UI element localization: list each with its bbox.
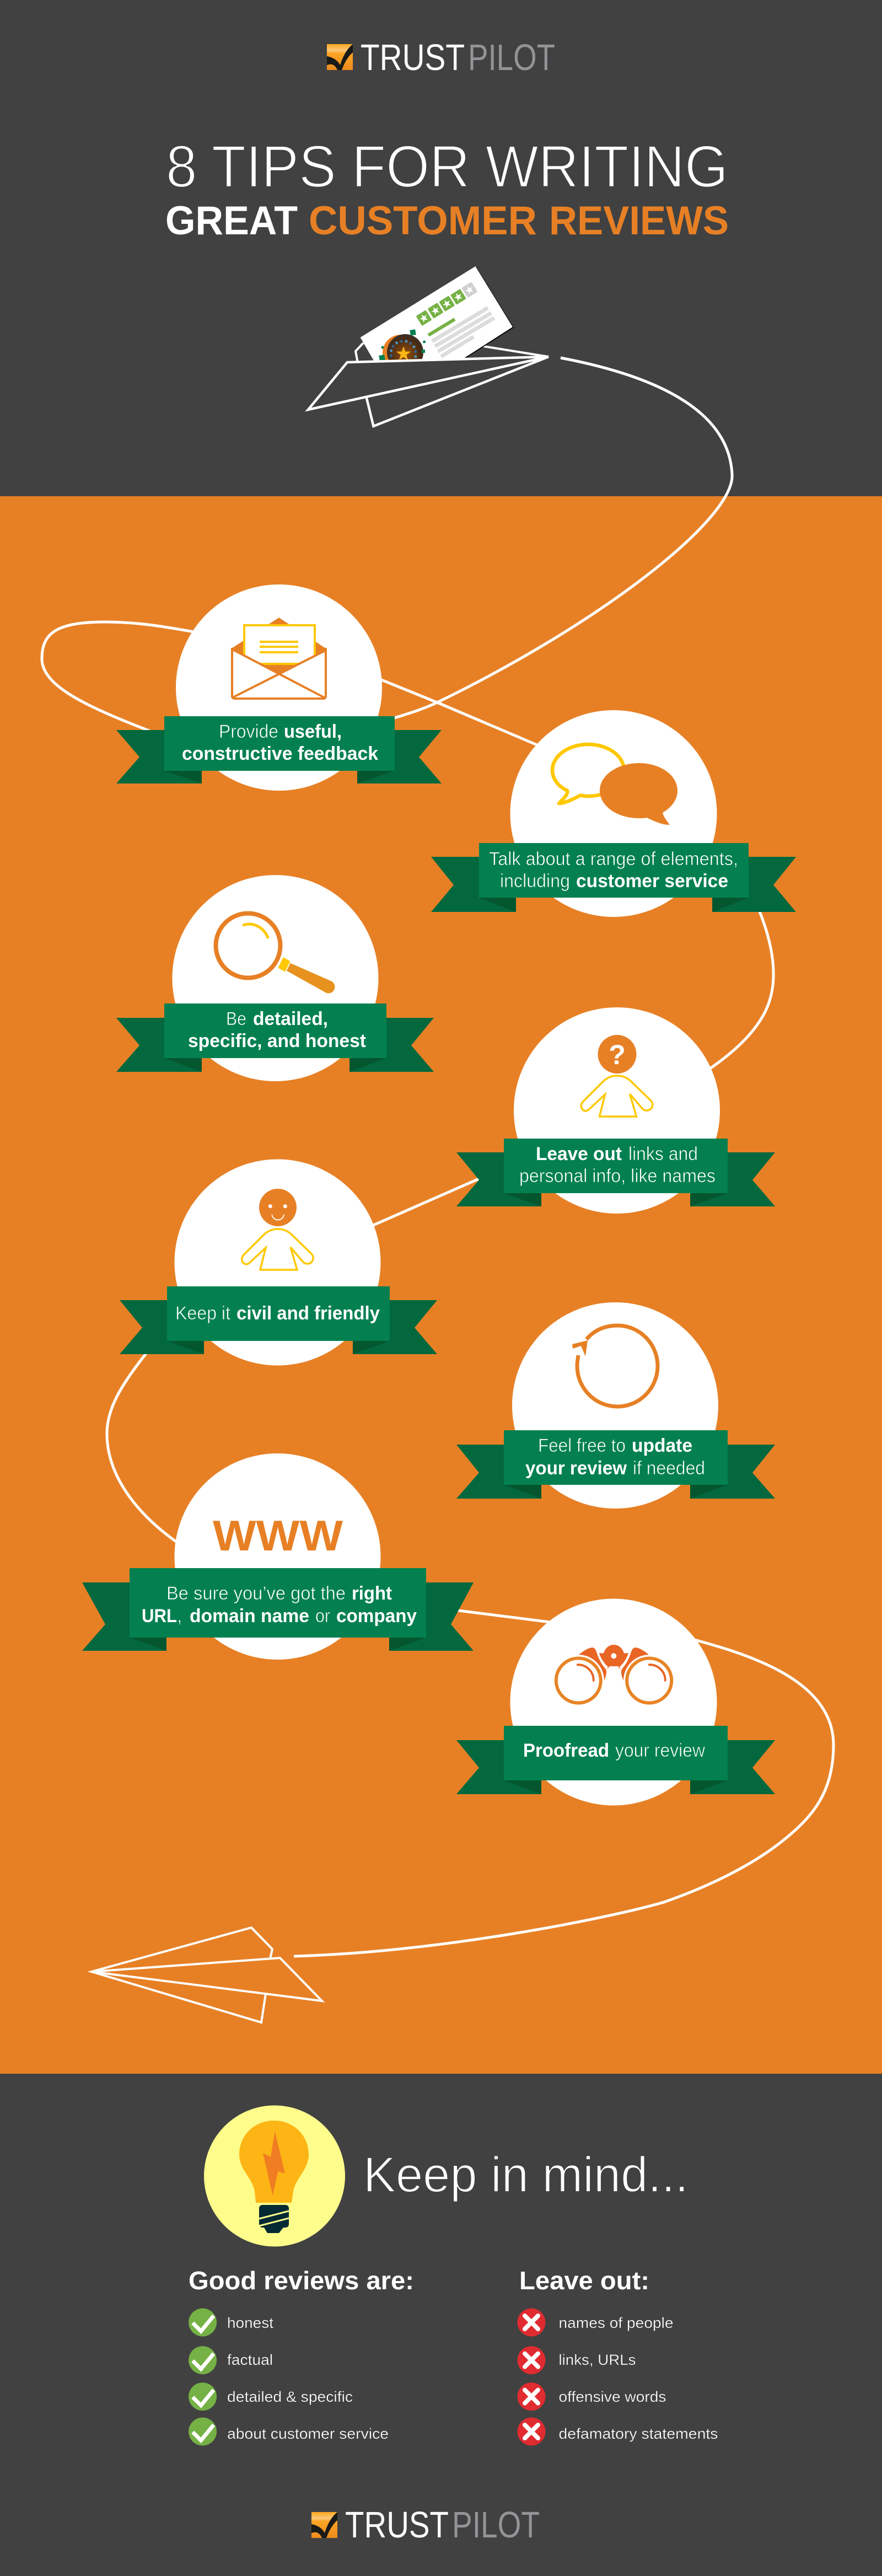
icon: circular arrow — [572, 1325, 658, 1407]
cross: names of people: names of people — [559, 2315, 674, 2331]
ribbon: right URL — [82, 1568, 474, 1651]
ribbon: useful feedback: Provide — [219, 721, 278, 742]
ribbon: right URL: right — [352, 1583, 392, 1604]
ribbon: update your review: update — [632, 1435, 692, 1456]
checklist: about customer service — [189, 2417, 389, 2446]
icon: landing paper plane — [92, 1928, 322, 2022]
icon: open envelope — [232, 618, 326, 699]
title — [165, 133, 729, 243]
review card — [361, 266, 514, 371]
cross: defamatory statements: defamatory statements — [559, 2425, 718, 2442]
tip 6: update your review — [456, 1302, 775, 1509]
ribbon: range of elements: Talk about a range of elements, — [489, 849, 738, 870]
icon: www: WWW — [213, 1511, 343, 1560]
checklist: honest: honest — [227, 2315, 274, 2331]
title: 8 TIPS FOR WRITING — [166, 133, 728, 200]
tip 5: civil and friendly — [120, 1159, 437, 1365]
checklist: factual: factual — [227, 2352, 273, 2368]
heading: keep in mind: Keep in mind... — [363, 2148, 689, 2203]
logo: Trustpilot footer: PILOT — [452, 2504, 540, 2546]
ribbon: right URL: domain name — [190, 1606, 309, 1627]
logo: Trustpilot footer — [311, 2504, 540, 2546]
title: GREAT — [165, 198, 298, 243]
ribbon: update your review: your review — [525, 1458, 627, 1479]
icon: light bulb — [204, 2105, 345, 2246]
ribbon: useful feedback: constructive feedback — [182, 743, 378, 764]
ribbon: right URL: or — [315, 1606, 330, 1627]
tip 4: leave out links — [456, 1007, 775, 1214]
cross: links, URLs: links, URLs — [559, 2352, 636, 2368]
ribbon: proofread: Proofread — [523, 1740, 609, 1761]
icon: speech bubbles — [552, 744, 677, 825]
ribbon: range of elements: customer service — [576, 871, 728, 892]
heading: good reviews are: Good reviews are: — [189, 2266, 414, 2295]
checklist: detailed and specific: detailed & specific — [227, 2389, 353, 2405]
ribbon: detailed and honest: detailed, — [253, 1008, 328, 1029]
icon: smiling person — [242, 1189, 313, 1270]
panel: good reviews — [189, 2266, 414, 2446]
ribbon: civil and friendly — [120, 1286, 437, 1354]
checklist: factual — [189, 2346, 273, 2374]
ribbon: right URL: Be sure you’ve got the — [166, 1583, 346, 1604]
logo: Trustpilot header — [327, 37, 555, 78]
ribbon: leave out links — [456, 1139, 775, 1206]
footer background — [0, 2074, 882, 2576]
ribbon: civil and friendly: civil and friendly — [236, 1303, 380, 1324]
checklist: honest — [189, 2308, 274, 2337]
checklist: detailed and specific — [189, 2382, 353, 2411]
ribbon: proofread — [456, 1726, 775, 1794]
ribbon: leave out links: links and — [628, 1144, 698, 1164]
heading: leave out: Leave out: — [519, 2266, 649, 2295]
header background — [0, 0, 882, 496]
tip 8: proofread — [456, 1599, 775, 1805]
tip 3: detailed and honest — [116, 875, 434, 1081]
ribbon: leave out links: Leave out — [536, 1144, 622, 1164]
icon: magnifying glass — [216, 913, 335, 993]
logo: Trustpilot footer: TRUST — [345, 2504, 449, 2546]
icon: binoculars — [556, 1645, 671, 1703]
ribbon: right URL: URL — [142, 1606, 177, 1627]
icon: paper plane with review card — [308, 266, 548, 426]
flight path line — [42, 358, 833, 1956]
checklist: about customer service: about customer service — [227, 2425, 389, 2442]
logo: Trustpilot header: PILOT — [468, 37, 555, 78]
ribbon: useful feedback — [116, 716, 442, 783]
ribbon: update your review — [456, 1430, 775, 1499]
cross: offensive words: offensive words — [559, 2389, 666, 2405]
ribbon: right URL: , — [177, 1606, 182, 1627]
icon: person with question mark: ? — [609, 1039, 626, 1070]
ribbon: useful feedback: useful, — [284, 721, 342, 742]
tip 2: range of elements — [431, 710, 796, 917]
cross: defamatory statements — [517, 2417, 718, 2446]
ribbon: update your review: if needed — [633, 1458, 705, 1479]
title: REVIEWS — [549, 198, 729, 243]
ribbon: leave out links: personal info, like names — [519, 1166, 716, 1187]
ribbon: detailed and honest: Be — [226, 1008, 246, 1029]
ribbon: right URL: company — [336, 1606, 417, 1627]
orange tips background — [0, 496, 882, 2074]
cross: offensive words — [517, 2382, 666, 2411]
ribbon: proofread: your review — [615, 1740, 705, 1761]
ribbon: range of elements — [431, 843, 796, 912]
cross: names of people — [517, 2308, 674, 2337]
ribbon: civil and friendly: Keep it — [175, 1303, 231, 1324]
tip 1: useful feedback — [116, 584, 442, 791]
ribbon: detailed and honest — [116, 1003, 434, 1072]
panel: leave out — [517, 2266, 718, 2446]
cross: links, URLs — [517, 2346, 636, 2374]
ribbon: update your review: Feel free to — [538, 1435, 626, 1456]
title: CUSTOMER — [309, 198, 537, 243]
ribbon: range of elements: including — [500, 871, 570, 892]
icon: person with question mark — [581, 1035, 653, 1117]
logo: Trustpilot header: TRUST — [361, 37, 465, 78]
ribbon: detailed and honest: specific, and honest — [188, 1031, 366, 1051]
tip 7: right URL — [82, 1453, 474, 1660]
